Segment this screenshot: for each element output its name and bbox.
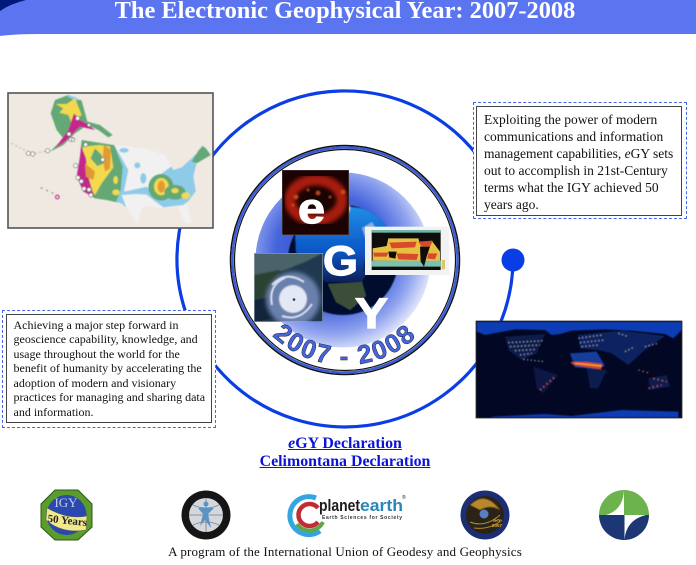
callout: left text box dashed frame bbox=[2, 310, 216, 428]
logo: International Geophysical Year 2007 bbox=[460, 490, 510, 540]
right text block: years ago. bbox=[484, 196, 539, 212]
right text block: management capabilities, eGY sets bbox=[484, 146, 673, 160]
logo: IGY 50 years bbox=[41, 490, 92, 540]
right text block: Exploiting the power of modern bbox=[484, 112, 657, 126]
logo: green and navy circle bbox=[599, 490, 649, 540]
left text block: practices for managing and sharing data bbox=[14, 390, 205, 404]
right text block: communications and information bbox=[484, 128, 663, 144]
left text block: and information. bbox=[14, 405, 93, 419]
link: eGY Declaration: eGY Declaration bbox=[288, 435, 402, 452]
link: Celimontana Declaration: Celimontana Declaration bbox=[260, 453, 430, 470]
logo: IGY 50 years: IGY bbox=[54, 495, 78, 510]
hurricane image bbox=[254, 253, 323, 326]
globe bbox=[288, 198, 398, 315]
left text block: geoscience capability, knowledge, and bbox=[14, 332, 198, 346]
Alaska bbox=[50, 95, 113, 152]
logo: planet earth: Earth Sciences for Society bbox=[322, 515, 402, 521]
night-lights world map bbox=[476, 321, 682, 418]
logo: planet earth: earth bbox=[360, 496, 403, 515]
left text block: usage throughout the world for the bbox=[14, 347, 180, 361]
eGY letters: G bbox=[323, 237, 358, 284]
eGY letters bbox=[298, 185, 388, 338]
right text block: terms what the IGY achieved 50 bbox=[484, 180, 659, 194]
eGY letters: Y bbox=[355, 290, 388, 338]
right text block: out to accomplish in 21st-Century bbox=[484, 162, 668, 178]
right text block bbox=[476, 106, 682, 216]
sun image bbox=[282, 170, 349, 235]
logo: International Geophysical Year 2007: IHY bbox=[493, 518, 501, 523]
logo: International Geophysical Year 2007: 2007 bbox=[492, 523, 503, 528]
ocean data map bbox=[365, 227, 449, 275]
eGY logo bbox=[230, 144, 460, 376]
curved years label: 2007 - 2008 bbox=[272, 324, 414, 364]
eGY letters: e bbox=[298, 185, 325, 233]
left text block: Achieving a major step forward in bbox=[14, 318, 178, 332]
footer credit: A program of the International Union of Geodesy and Geophysics bbox=[168, 544, 522, 559]
left text block: adoption of modern and visionary bbox=[14, 376, 176, 390]
logo: planet earth: planet bbox=[319, 496, 360, 515]
callout: right text box dashed frame bbox=[473, 102, 687, 219]
map: US seismic hazard bbox=[8, 93, 213, 228]
title banner bbox=[0, 0, 696, 36]
lower 48 base bbox=[76, 140, 211, 223]
logo: IGY 50 years: 50 Years bbox=[47, 513, 88, 529]
logo: planet earth: ® bbox=[402, 494, 406, 501]
left text block: benefit of humanity by accelerating the bbox=[14, 361, 202, 375]
logo: planet earth bbox=[290, 494, 406, 535]
left text block bbox=[6, 314, 212, 422]
logo: International Polar Year bbox=[182, 490, 230, 540]
